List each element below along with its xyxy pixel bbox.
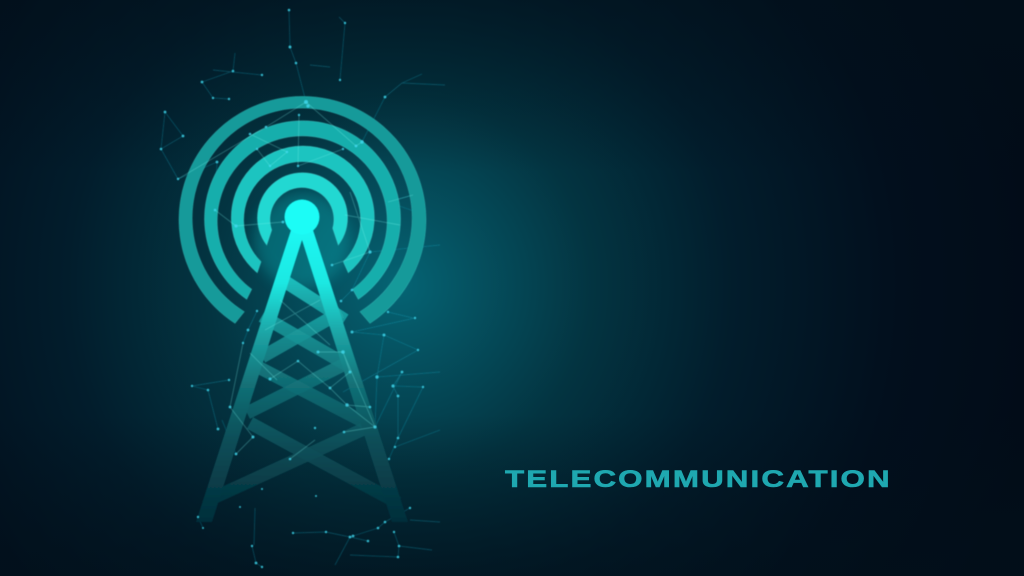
second ring — [205, 121, 400, 299]
antenna glow — [254, 192, 350, 288]
transmission tower — [196, 200, 408, 522]
tower legs — [196, 230, 408, 522]
title: TELECOMMUNICATION: TELECOMMUNICATION — [505, 465, 890, 492]
third ring — [231, 146, 374, 273]
signal rings — [179, 96, 426, 323]
outer ring — [179, 96, 426, 323]
network mesh: background lines — [161, 10, 445, 567]
inner ring — [258, 173, 348, 245]
antenna head — [284, 200, 320, 234]
cross bars — [213, 279, 398, 503]
network mesh: overlay lines on rings and tower — [178, 102, 413, 459]
network nodes — [160, 9, 424, 568]
